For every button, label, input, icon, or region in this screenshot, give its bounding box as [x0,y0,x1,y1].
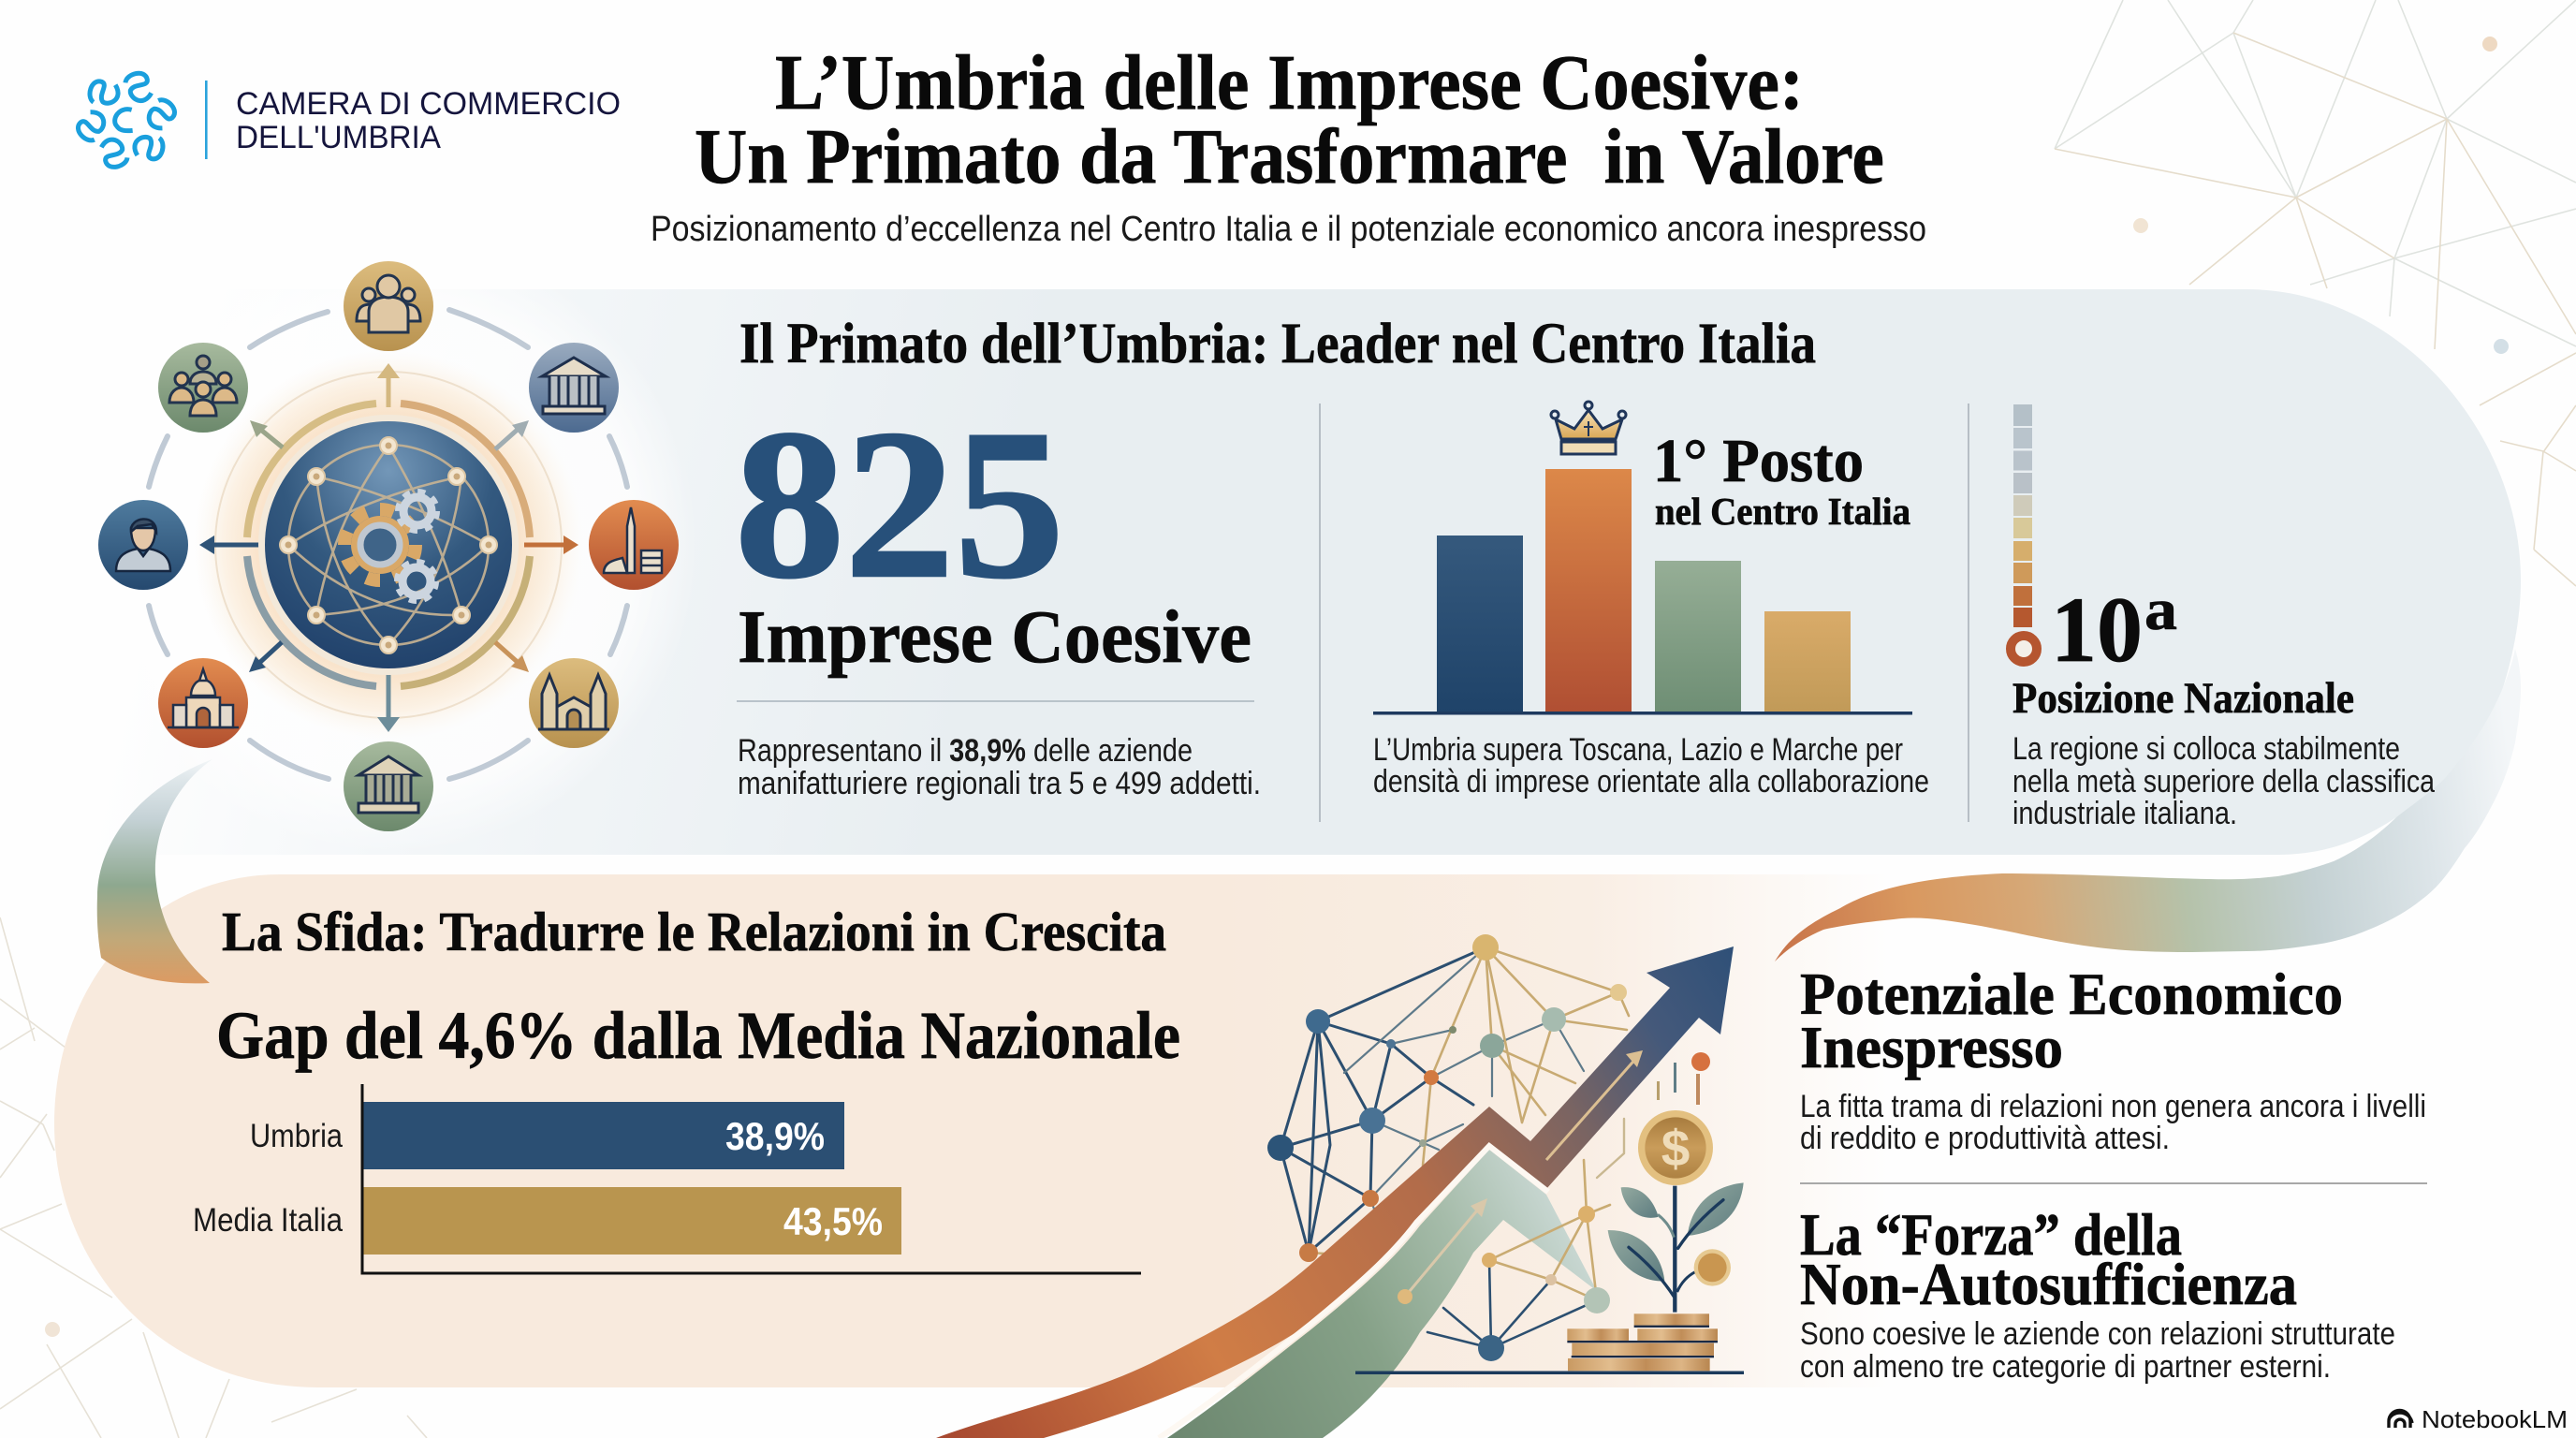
hub diagram [80,236,697,854]
arrow: top left [250,420,283,448]
stat: 825 imprese coesive: 825 [735,387,1064,623]
section heading: la sfida: La Sfida: Tradurre le Relazioni in Crescita [222,901,1166,962]
network graph upper [1281,947,1629,1255]
bar: media italia [193,1187,901,1255]
stat: decima posizione: 10 [2051,578,2143,682]
arrow: bottom right [495,642,529,672]
arrow: top right [495,420,529,449]
illustration: network, growth arrow and plant [936,934,1744,1438]
network nodes [280,437,497,653]
network nodes [1267,934,1627,1361]
icon: bottom institution [344,741,433,831]
bar: umbria: Umbria [250,1118,343,1154]
icon: right skyscraper [589,500,679,590]
globe [258,415,519,675]
icon: left professional [98,500,188,590]
text: description 825 [738,733,1261,801]
icon: crown [1551,402,1626,454]
text: description primo posto [1373,732,1929,800]
stat: 825 imprese coesive [735,387,1261,801]
text: description decima posizione: industriale italiana. [2012,796,2237,831]
arrow: right [524,536,578,554]
icon: top left community [158,343,248,433]
text block: forza della non-autosufficienza: con almeno tre categorie di partner esterni. [1800,1349,2331,1385]
stat: decima posizione: a [2144,579,2177,642]
arrow: green growth arrow [1167,1150,1597,1438]
subtitle: Posizionamento d’eccellenza nel Centro Italia e il potenziale economico ancora inespresso [651,210,1926,249]
arrow: tan accent upper [1546,1050,1643,1160]
text: description decima posizione: La regione si colloca stabilmente [2012,731,2400,767]
outer dashed ring [149,310,627,779]
logo: Camera di Commercio dell'Umbria [73,73,621,167]
text block: forza della non-autosufficienza: Sono coesive le aziende con relazioni strutturate [1800,1316,2395,1352]
heading: gap: Gap del 4,6% dalla Media Nazionale [216,998,1180,1073]
stat: decima posizione [2012,578,2354,723]
stat: decima posizione: Posizione Nazionale [2012,674,2354,723]
text: description decima posizione: nella metà superiore della classifica [2012,764,2435,800]
stat: primo posto [1653,427,1910,533]
logo wordmark: DELL'UMBRIA [236,120,441,155]
icon: bottom right castle [529,658,619,748]
icon: camera logo mark [73,73,180,167]
network graph lower [1427,1119,1624,1348]
icon: plant with coin [1567,1110,1744,1371]
stat: 825 imprese coesive: Imprese Coesive [738,594,1251,679]
icon: falling marks [1657,1052,1710,1105]
icon: top people group [344,261,433,351]
text block: potenziale economico: Inespresso [1800,1015,2063,1080]
text block: potenziale economico [1800,961,2426,1156]
bar: umbria [250,1102,844,1169]
bar: media italia: 43,5% [783,1199,883,1243]
icon: gears [344,492,437,601]
arrows from hub [199,363,578,732]
stat: primo posto: nel Centro Italia [1655,490,1910,533]
text: description primo posto: densità di imprese orientate alla collaborazione [1373,764,1929,800]
text: description primo posto: L’Umbria supera Toscana, Lazio e Marche per [1373,732,1903,768]
section heading: il primato: Il Primato dell’Umbria: Leader nel Centro Italia [739,313,1816,375]
hub glow and rings [194,350,583,740]
icon: thermometer scale [2011,404,2037,662]
icon: bottom left civic building [158,658,248,748]
ribbon: left connector [97,759,212,983]
logo wordmark [236,86,621,155]
text: description 825: Rappresentano il 38,9% delle aziende [738,733,1193,769]
text: description decima posizione [2012,731,2435,831]
text: description 825: manifatturiere regionali tra 5 e 499 addetti. [738,766,1261,801]
title: L’Umbria delle Imprese Coesive: [775,39,1804,126]
text block: potenziale economico: La fitta trama di relazioni non genera ancora i livelli [1800,1089,2426,1124]
panel: il primato (top) [56,289,2521,855]
stat: primo posto: 1° Posto [1653,427,1864,495]
bar: media italia: Media Italia [193,1202,343,1239]
title: Un Primato da Trasformare in Valore [695,113,1884,200]
text block: forza della non-autosufficienza: La “Forza” della [1800,1202,2182,1268]
text block: forza della non-autosufficienza: Non-Autosufficienza [1800,1252,2297,1317]
arrow: top [377,363,400,407]
arrow: bottom left [249,642,282,672]
arrow: left [199,536,264,554]
icon: plant with coin: $ [1661,1120,1690,1178]
arrow: bottom [377,669,400,732]
ribbon: right connector [1775,649,2521,961]
text block: potenziale economico: Potenziale Economico [1800,961,2343,1027]
panel: la sfida (bottom) [54,874,1891,1387]
arrow: orange growth arrow [936,946,1734,1438]
bar chart: umbria vs media italia [193,1084,1141,1275]
text block: forza della non-autosufficienza [1800,1202,2395,1385]
logo wordmark: CAMERA DI COMMERCIO [236,86,621,122]
notebooklm watermark: NotebookLM [2422,1405,2568,1433]
text block: potenziale economico: di reddito e produttività attesi. [1800,1121,2170,1156]
icon: top right institution [529,343,619,433]
arrow: tan accent lower [1405,1198,1487,1297]
title [695,39,1884,200]
bar: umbria: 38,9% [725,1114,825,1158]
bar chart: centro italia ranking [1373,469,1912,715]
